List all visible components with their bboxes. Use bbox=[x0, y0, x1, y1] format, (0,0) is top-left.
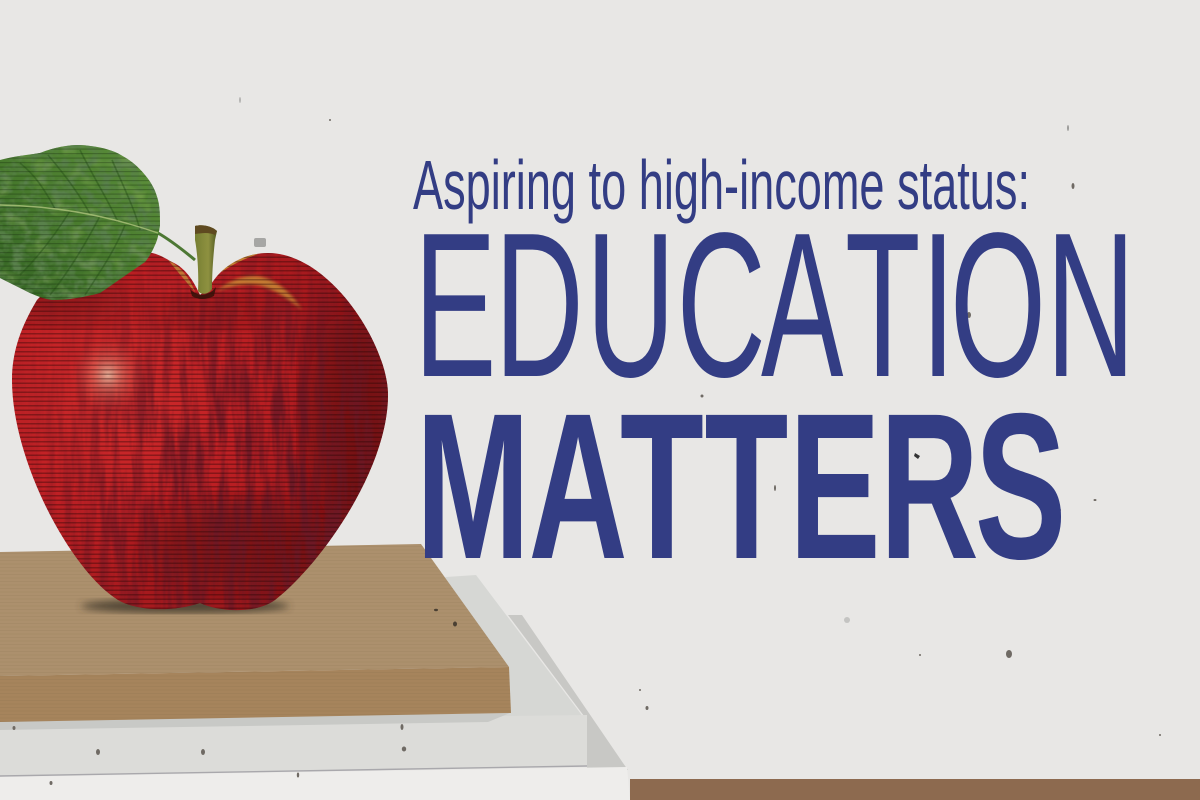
leaf petiole bbox=[158, 233, 195, 260]
leaf texture bbox=[0, 140, 165, 305]
second book front face bbox=[0, 715, 587, 776]
leaf blade bbox=[0, 145, 160, 300]
apple shadow bbox=[81, 599, 289, 613]
top book top surface bbox=[0, 544, 509, 676]
book stack bbox=[0, 544, 630, 800]
second book bottom edge bbox=[0, 766, 587, 776]
leaf bbox=[0, 140, 195, 305]
title bbox=[413, 146, 1135, 603]
second book top surface bbox=[400, 575, 587, 722]
apple stem bbox=[190, 225, 217, 299]
apple highlight bbox=[78, 345, 139, 405]
yellow top edge bbox=[222, 254, 258, 272]
title line 3: MATTERS bbox=[416, 370, 1066, 603]
shadow under top book bbox=[0, 713, 510, 730]
table edge bbox=[630, 779, 1200, 800]
yellow streak right of stem bbox=[217, 276, 302, 310]
book ribbing texture bbox=[0, 544, 511, 722]
apple body bbox=[12, 253, 388, 610]
yellow streak left of stem bbox=[168, 260, 195, 292]
apple shading and texture bbox=[12, 253, 388, 610]
apple bbox=[0, 225, 400, 620]
title line 2: EDUCATION bbox=[414, 189, 1135, 420]
bottom book front face bbox=[0, 767, 630, 800]
third book top surface bbox=[508, 615, 628, 770]
apple ribbing bbox=[12, 253, 388, 609]
top book front face bbox=[0, 667, 511, 722]
leaf midrib bbox=[0, 205, 158, 233]
